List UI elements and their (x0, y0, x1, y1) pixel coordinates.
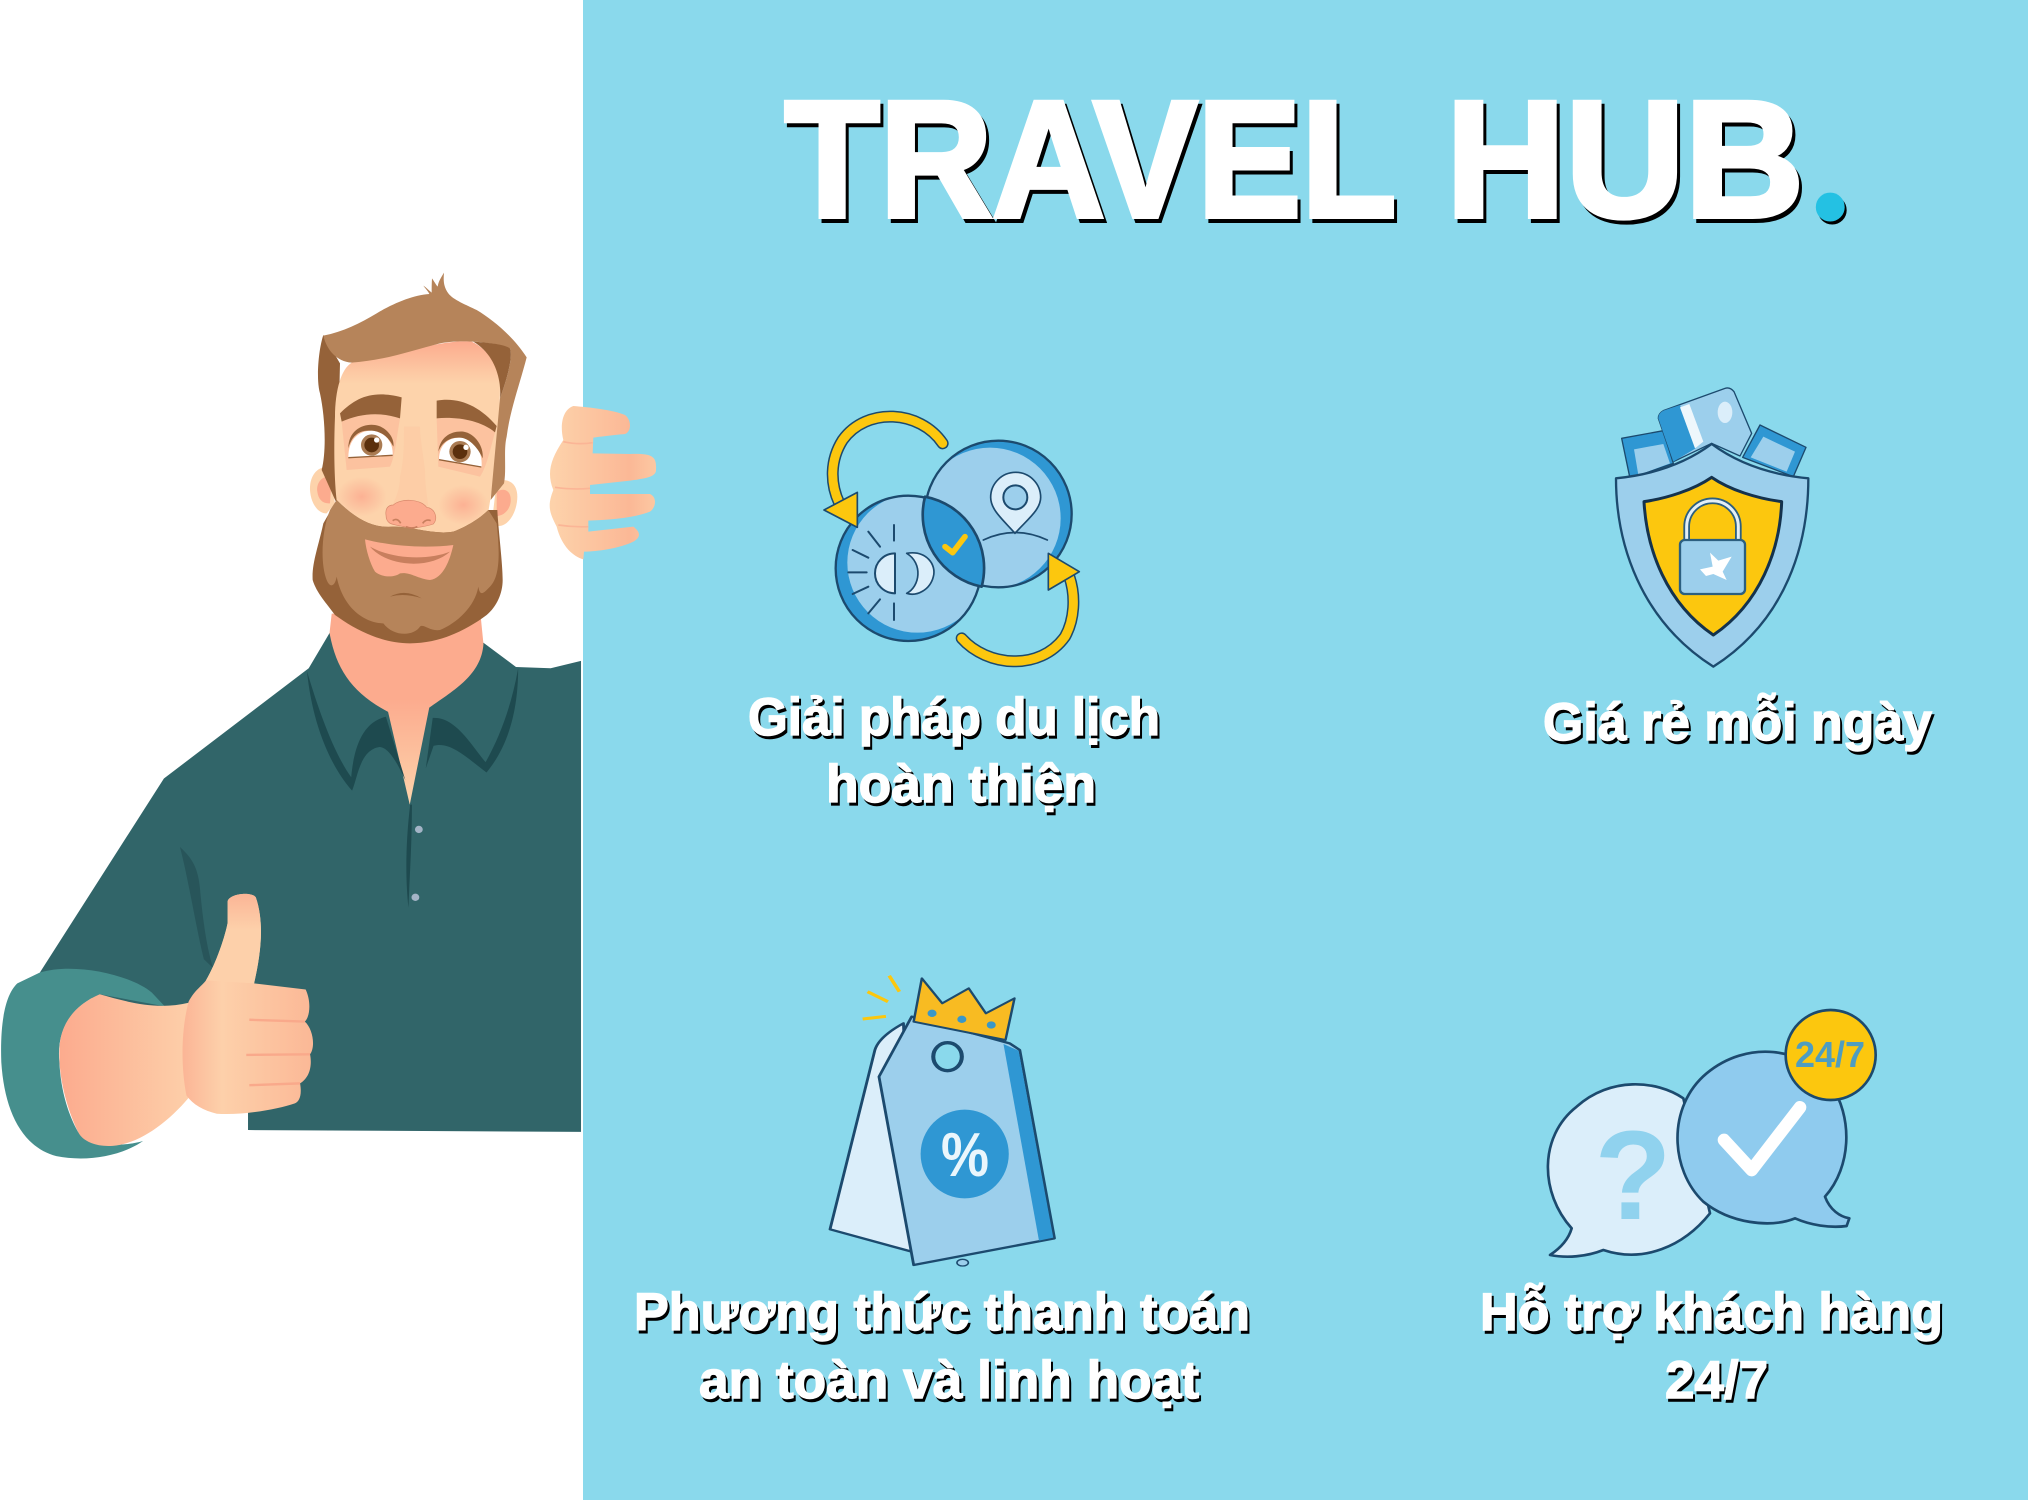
shield inner (1644, 477, 1782, 635)
smile line (370, 547, 450, 564)
mouth (365, 539, 453, 580)
arrow bottom right (962, 553, 1079, 661)
padlock body (1680, 540, 1745, 594)
eye right lash line (439, 460, 481, 467)
eye left (348, 425, 394, 458)
badge circle (1786, 1010, 1876, 1100)
discount badge (921, 1110, 1009, 1198)
card (1658, 388, 1752, 462)
bubbles (1548, 1010, 1876, 1257)
character: bearded man giving thumbs up (1, 273, 656, 1158)
eye left iris (361, 434, 382, 456)
shield outer (1616, 444, 1808, 667)
icon: speech bubbles with 24/7 badge (1548, 1010, 1876, 1257)
eye left pupil (364, 438, 379, 452)
thumb (206, 894, 261, 983)
eye right glint (463, 445, 469, 450)
chin line (390, 593, 422, 598)
frame right inner (1751, 437, 1795, 472)
card stripe (1680, 404, 1703, 448)
button bottom (411, 894, 419, 901)
caption line 1: Phương thức thanh toán (634, 1283, 1250, 1342)
forearm (59, 994, 193, 1146)
percent sign: % (941, 1121, 989, 1190)
overlap lens (923, 497, 984, 587)
location pin (991, 472, 1041, 533)
bubble left (1548, 1084, 1710, 1257)
beard base (313, 500, 503, 643)
arrow top outline (833, 417, 943, 503)
man head and right hand (310, 273, 656, 643)
title word: TRAVEL: TRAVEL (784, 68, 1396, 252)
arrow bottom head (1048, 553, 1079, 590)
hand gripping the panel (550, 406, 656, 559)
collar right (426, 668, 518, 772)
padlock shackle (1687, 501, 1738, 540)
circle right base (925, 441, 1072, 587)
caption line 2: 24/7 (1665, 1351, 1768, 1410)
caption: complete travel solution (748, 688, 1160, 814)
arrow bottom body (962, 577, 1073, 661)
icon: discount price tag with crown (830, 976, 1054, 1266)
caption line 1: Hỗ trợ khách hàng (1480, 1282, 1943, 1342)
question mark: ? (1595, 1105, 1671, 1246)
caption line 2: an toàn và linh hoạt (699, 1351, 1199, 1410)
card dark end (1658, 405, 1696, 462)
panel: 24/7 customer support (1480, 1010, 1943, 1410)
icon: shield with padlock and cards (1616, 388, 1808, 667)
caption: 24/7 customer support (1480, 1282, 1943, 1410)
beard light (323, 500, 499, 634)
nose (386, 500, 436, 528)
tag edge (1003, 1044, 1053, 1241)
crown (914, 978, 1014, 1040)
title word: HUB: HUB (1446, 68, 1804, 252)
eye right pupil (453, 444, 467, 459)
man torso and arm (1, 614, 581, 1158)
panel: complete travel solution (748, 417, 1160, 814)
cheek left (337, 477, 387, 517)
caption line 1: Giải pháp du lịch (748, 688, 1160, 747)
finger creases (246, 1020, 310, 1085)
badge text: 24/7 (1795, 1034, 1865, 1075)
arrow top body (833, 417, 943, 503)
card mark (1718, 402, 1732, 423)
ear left inner (317, 476, 332, 503)
circle left face (847, 493, 987, 633)
crescent moon (907, 553, 934, 594)
shirt (40, 633, 581, 1132)
circle left outline (836, 496, 981, 641)
eye left lash line (348, 455, 393, 458)
tag knob (957, 1259, 968, 1266)
title accent dot: . (1808, 60, 1852, 258)
horizon (983, 532, 1047, 540)
button top (415, 826, 423, 833)
arrow top head (824, 492, 857, 527)
bubble right (1677, 1052, 1849, 1227)
eye right lid (438, 432, 483, 458)
hair back (318, 335, 340, 503)
collar left (307, 671, 405, 791)
eye shadow right (437, 418, 495, 477)
panel: low prices every day (1543, 388, 1933, 752)
check mark (1724, 1107, 1800, 1170)
sleeve cuff (1, 969, 165, 1158)
ear right inner (497, 490, 511, 516)
arrow top left (824, 417, 943, 527)
crown jewels (932, 1013, 991, 1025)
tag hole (933, 1043, 962, 1071)
caption: safe and flexible payment (634, 1283, 1250, 1410)
face (334, 341, 500, 534)
eye right iris (449, 441, 471, 462)
placket (406, 805, 412, 908)
hair right shadow (473, 342, 511, 398)
icon: overlapping circles with arrows (824, 417, 1079, 661)
caption line 2: hoàn thiện (826, 755, 1096, 814)
frame left (1622, 431, 1673, 478)
bird mark (1700, 553, 1732, 580)
neck (330, 614, 483, 805)
sparkle rays (863, 976, 899, 1019)
sun rays (848, 525, 894, 620)
pin centre (1003, 485, 1027, 509)
tag front (879, 1017, 1054, 1265)
panel: blue background (583, 0, 2028, 1500)
eye left glint (374, 437, 379, 443)
frame right (1743, 425, 1806, 477)
check mark (945, 537, 965, 553)
eye shadow left (342, 414, 400, 470)
half sun (875, 553, 895, 593)
frame left inner (1634, 444, 1670, 475)
eye left white (348, 431, 393, 457)
sleeve crease (180, 847, 213, 968)
fist (183, 894, 313, 1114)
ear right (493, 480, 517, 526)
caption: low prices every day: Giá rẻ mỗi ngày (1543, 692, 1933, 752)
nose bridge shading (392, 427, 428, 507)
circle left base (836, 496, 981, 641)
nostrils (393, 519, 431, 528)
eyebrow right (437, 400, 497, 432)
padlock shackle highlight (1687, 501, 1738, 540)
hair front (323, 273, 527, 500)
tag back (830, 1023, 912, 1252)
title (784, 60, 1852, 258)
thumbs-up hand (183, 894, 313, 1114)
hand knuckle creases (555, 442, 593, 527)
eye right white (439, 438, 482, 467)
circle right face (919, 448, 1061, 589)
ear left (310, 467, 335, 513)
panel: safe and flexible payment (634, 976, 1250, 1410)
eye left lid (348, 425, 394, 448)
eye right (438, 432, 483, 467)
arrow bottom outline (962, 577, 1073, 661)
eyebrow left (340, 394, 402, 422)
cheek right (438, 485, 488, 525)
circle right outline (925, 441, 1072, 587)
